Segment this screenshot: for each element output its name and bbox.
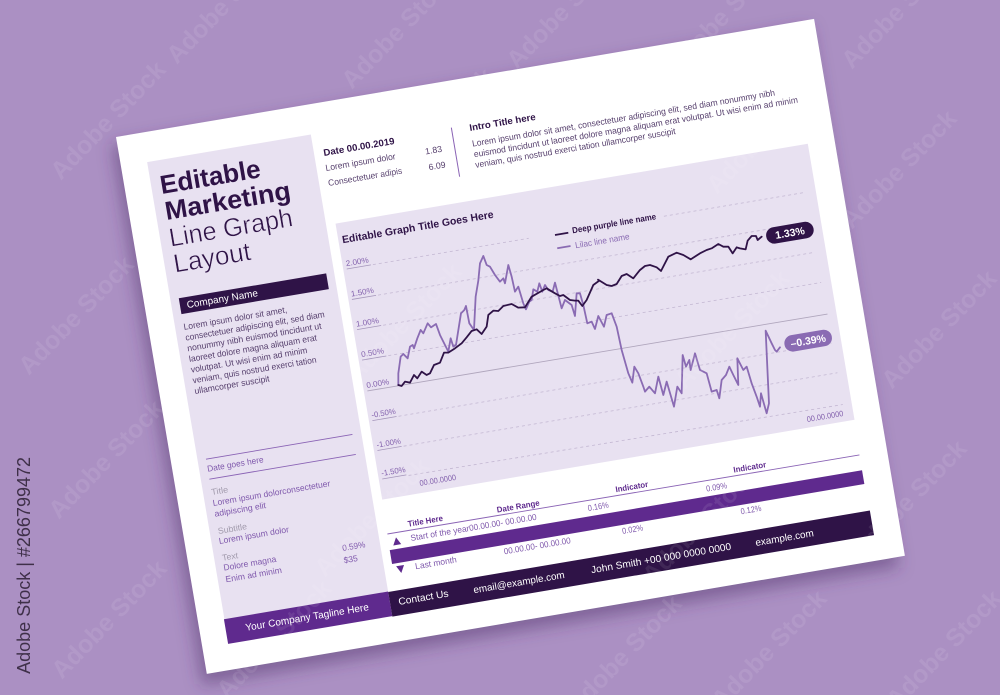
gridlines bbox=[347, 191, 843, 482]
sidebar details: Enim ad minim bbox=[225, 565, 283, 584]
company name bar bbox=[179, 273, 329, 314]
table row: start of the year bbox=[392, 480, 728, 547]
table bbox=[385, 444, 866, 575]
watermarks: Adobe Stock bbox=[846, 435, 972, 564]
watermarks: Adobe Stock bbox=[836, 105, 962, 234]
x axis labels: 00.00.0000 bbox=[419, 473, 457, 488]
sidebar paragraph: consectetuer adipiscing elit, sed diam bbox=[185, 309, 325, 343]
watermarks: Adobe Stock bbox=[45, 56, 171, 185]
table header: Indicator bbox=[733, 460, 768, 475]
title: Line Graph bbox=[167, 202, 295, 253]
sidebar details: Lorem ipsum dolorconsectetuer bbox=[212, 478, 331, 508]
intro text: veniam, quis nostrud exerci tation ullamcorper suscipit bbox=[474, 126, 677, 170]
page shadow bbox=[112, 27, 899, 685]
intro text: euismod tincidunt ut laoreet dolore magna aliquam erat volutpat. Ut wisi enim ad minim bbox=[473, 95, 799, 159]
sidebar details: Lorem ipsum dolor bbox=[218, 524, 290, 546]
watermarks: Adobe Stock bbox=[373, 63, 499, 192]
value pill: deep purple bbox=[765, 221, 815, 245]
y axis labels: 2.00% bbox=[345, 255, 369, 268]
y axis labels: 0.00% bbox=[366, 377, 390, 390]
date summary: 1.83 bbox=[424, 144, 443, 156]
sidebar details: adipiscing elit bbox=[214, 500, 267, 519]
table header: Indicator bbox=[615, 480, 650, 494]
date summary: Date 00.00.2019 bbox=[323, 136, 395, 159]
y axis labels bbox=[345, 255, 406, 479]
watermarks: Adobe Stock bbox=[13, 251, 139, 380]
sidebar details: Dolore magna bbox=[223, 554, 277, 573]
sidebar details: Text bbox=[221, 550, 239, 563]
footer contact bar: email@example.com bbox=[473, 570, 566, 596]
y axis labels: 0.50% bbox=[360, 346, 385, 359]
table header: Date Range bbox=[496, 498, 541, 515]
x axis labels bbox=[419, 407, 845, 490]
sidebar paragraph bbox=[183, 299, 334, 396]
sidebar paragraph: volutpat. Ut wisi enim ad minim bbox=[190, 345, 308, 375]
title: Editable bbox=[158, 153, 263, 200]
sidebar details: Subtitle bbox=[217, 521, 248, 536]
watermarks: Adobe Stock bbox=[876, 265, 1000, 394]
y axis labels: 1.50% bbox=[350, 286, 374, 299]
y axis labels: 1.00% bbox=[355, 316, 380, 329]
date summary: Lorem ipsum dolor bbox=[325, 151, 396, 173]
sidebar details: 0.59% bbox=[341, 539, 366, 553]
table row: start of the year: Start of the year bbox=[410, 523, 470, 543]
watermarks: Adobe Stock bbox=[43, 395, 169, 524]
sidebar details bbox=[210, 463, 368, 585]
sidebar paragraph: nonummy nibh euismod tincidunt ut bbox=[186, 321, 323, 353]
table header bbox=[386, 444, 859, 535]
footer contact bar: example.com bbox=[755, 528, 815, 549]
table row: start of the year: 0.16% bbox=[587, 500, 610, 513]
panel: left sidebar bbox=[147, 134, 388, 620]
value pill: lilac bbox=[783, 329, 833, 353]
legend: Lilac line name bbox=[574, 231, 630, 250]
footer contact bar bbox=[388, 511, 874, 617]
date block: Date goes here bbox=[206, 454, 264, 474]
footer contact bar: John Smith +00 000 0000 0000 bbox=[590, 542, 733, 576]
watermarks: Adobe Stock bbox=[669, 265, 795, 394]
title: Marketing bbox=[163, 175, 293, 226]
y axis labels: -0.50% bbox=[371, 407, 396, 420]
watermarks: Adobe Stock bbox=[637, 460, 763, 589]
stock id vertical text: Adobe Stock | #266799472 bbox=[14, 457, 34, 674]
y axis labels: -1.50% bbox=[381, 465, 406, 478]
watermarks: Adobe Stock bbox=[46, 555, 172, 684]
title bbox=[158, 149, 302, 279]
date summary: Consectetuer adipis bbox=[327, 166, 403, 188]
document page bbox=[116, 19, 905, 674]
sidebar paragraph: ullamcorper suscipit bbox=[194, 373, 271, 396]
x axis labels: 00.00.0000 bbox=[806, 409, 845, 424]
table row: last month bbox=[396, 503, 762, 574]
watermarks: Adobe Stock bbox=[701, 70, 827, 199]
company name bar: Company Name bbox=[186, 288, 259, 311]
intro text bbox=[468, 68, 800, 170]
table row: start of the year: 0.09% bbox=[705, 480, 728, 494]
line: lilac series bbox=[398, 256, 780, 413]
table divider bar bbox=[390, 470, 864, 564]
table row: last month: 00.00.00- 00.00.00 bbox=[503, 535, 572, 556]
sidebar paragraph: Lorem ipsum dolor sit amet, bbox=[183, 305, 288, 332]
footer contact bar: Contact Us bbox=[398, 589, 449, 608]
table header: Title Here bbox=[407, 514, 444, 529]
table row: last month: Last month bbox=[414, 554, 458, 571]
table row: start of the year: 00.00.00- 00.00.00 bbox=[468, 512, 538, 533]
intro text: Intro Title here bbox=[469, 112, 537, 134]
table row: last month: 0.02% bbox=[621, 523, 644, 536]
footer tagline bar: Your Company Tagline Here bbox=[245, 602, 370, 634]
watermarks: Adobe Stock bbox=[309, 453, 435, 582]
y axis labels: -1.00% bbox=[376, 437, 401, 450]
sidebar paragraph: veniam, quis nostrud exerci tation bbox=[192, 355, 317, 385]
watermarks: Adobe Stock bbox=[341, 258, 467, 387]
date summary: 6.09 bbox=[428, 159, 446, 172]
line: deep purple series bbox=[398, 236, 762, 386]
legend bbox=[554, 211, 660, 253]
date block bbox=[206, 434, 356, 479]
date summary bbox=[322, 128, 446, 189]
value pill: lilac: –0.39% bbox=[790, 332, 827, 350]
graph title: Editable Graph Title Goes Here bbox=[341, 209, 495, 246]
value pill: deep purple: 1.33% bbox=[774, 225, 806, 242]
sidebar paragraph: laoreet dolore magna aliquam erat bbox=[188, 332, 318, 364]
intro text: Lorem ipsum dolor sit amet, consectetuer adipiscing elit, sed diam nonummy nibh bbox=[471, 88, 776, 149]
panel: graph bbox=[336, 144, 855, 500]
footer tagline bar bbox=[224, 591, 392, 644]
legend: Deep purple line name bbox=[571, 211, 657, 235]
sidebar details: Title bbox=[210, 484, 229, 497]
sidebar details: $35 bbox=[343, 553, 359, 565]
title: Layout bbox=[171, 236, 254, 279]
table row: last month: 0.12% bbox=[740, 503, 762, 516]
